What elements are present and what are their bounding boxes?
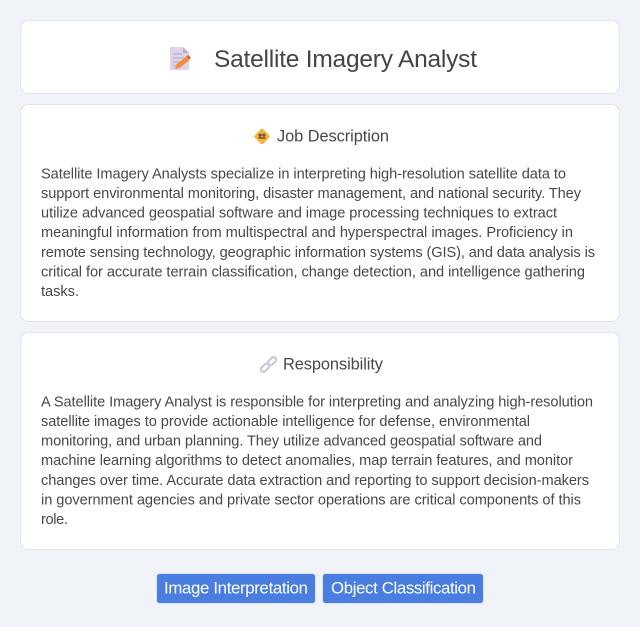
icon: construction diamond	[254, 128, 270, 145]
text block: job description	[41, 166, 595, 300]
text block: job description: remote sensing technology, geographic information systems (GIS), and data analysis is	[41, 245, 595, 261]
text block: job description: meaningful information from multispectral and hyperspectral images. Proficiency in	[41, 225, 573, 241]
text block: responsibility: in government agencies and private sector operations are critical components of this	[41, 492, 581, 508]
icon: chain link	[260, 356, 277, 373]
text block: job description: Satellite Imagery Analysts specialize in interpreting high-resolution satellite data to	[41, 166, 566, 182]
panel: title card	[20, 20, 620, 94]
tag: image interpretation	[156, 574, 316, 604]
text block: responsibility: satellite images to provide actionable intelligence for defense, environmental	[41, 414, 530, 430]
panel: job description	[20, 104, 620, 322]
text block: responsibility	[41, 394, 593, 528]
text block: responsibility: machine learning algorithms to detect anomalies, map terrain features, and monitor	[41, 453, 573, 469]
text block: responsibility: monitoring, and urban planning. They utilize advanced geospatial software and	[41, 434, 542, 450]
panel: responsibility	[20, 332, 620, 550]
icon: document with pencil	[170, 47, 191, 70]
text block: job description: support environmental monitoring, disaster management, and national security. They	[41, 186, 582, 202]
heading: responsibility: Responsibility	[283, 356, 384, 374]
text block: responsibility: changes over time. Accurate data extraction and reporting to support decision-makers	[41, 473, 589, 489]
text block: job description: tasks.	[41, 284, 79, 300]
text block: job description: critical for accurate terrain classification, change detection, and intelligence gathering	[41, 264, 585, 280]
title: Satellite Imagery Analyst	[214, 46, 477, 73]
text block: responsibility: A Satellite Imagery Analyst is responsible for interpreting and analyzing high-resolution	[41, 394, 593, 410]
tag: image interpretation: Image Interpretation	[164, 578, 308, 598]
text block: job description: utilize advanced geospatial software and image processing techniques to extract	[41, 206, 557, 222]
tag: object classification	[322, 574, 484, 604]
text block: responsibility: role.	[41, 512, 68, 528]
tag: object classification: Object Classification	[331, 578, 476, 598]
heading: job description: Job Description	[277, 128, 389, 146]
